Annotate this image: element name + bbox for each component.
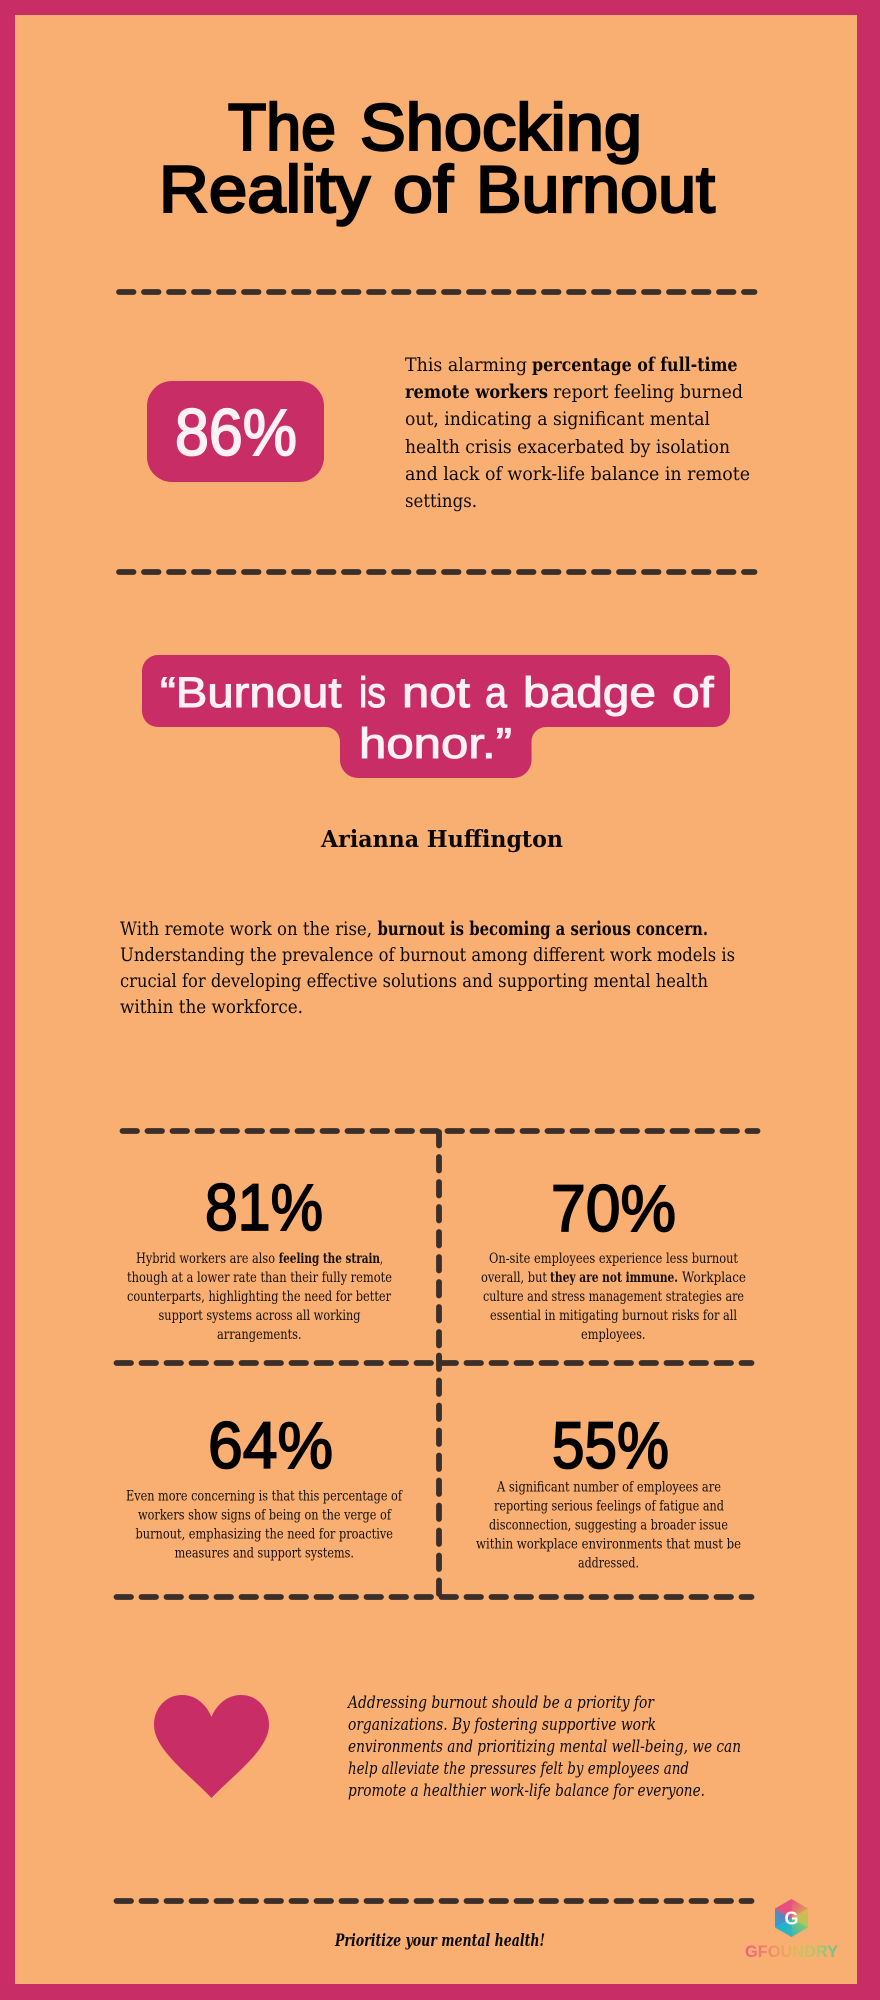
stat description: percentage of full-time	[532, 354, 738, 376]
stat cell: 55% fatigue and disconnection: reporting serious feelings of fatigue and	[494, 1499, 724, 1515]
panel: stats grid	[116, 1131, 758, 1597]
stat cell: 55% fatigue and disconnection: within workplace environments that must be	[476, 1537, 741, 1553]
stat cell: 81% hybrid workers: 81%	[205, 1170, 323, 1244]
stat cell: 70% on-site employees: employees.	[581, 1327, 646, 1343]
stat cell: 70% on-site employees: Workplace	[682, 1270, 746, 1286]
stat description: health crisis exacerbated by isolation	[405, 437, 730, 458]
icon: hexagon mark: G	[784, 1908, 799, 1928]
stat cell: 70% on-site employees: On-site employees experience less burnout	[489, 1251, 738, 1267]
quote callout: badge	[523, 669, 656, 717]
stat cell: 55% fatigue and disconnection: addressed.	[578, 1556, 639, 1572]
stat cell: 64% verge of burnout: workers show signs of being on the verge of	[138, 1508, 392, 1524]
stat cell: 64% verge of burnout	[126, 1408, 403, 1562]
logo: GFoundry: GFOUNDRY	[745, 1943, 838, 1961]
stat cell: 70% on-site employees	[481, 1171, 746, 1343]
intro paragraph: With remote work on the rise,	[120, 919, 372, 940]
stat cell: 70% on-site employees: culture and stress management strategies are	[483, 1289, 744, 1305]
intro paragraph: Understanding the prevalence of burnout among different work models is	[120, 945, 735, 966]
title	[159, 90, 715, 226]
stat cell: 55% fatigue and disconnection: 55%	[552, 1408, 669, 1482]
intro paragraph: within the workforce.	[120, 997, 303, 1018]
closing paragraph: organizations. By fostering supportive work	[348, 1715, 656, 1734]
logo: GFoundry	[745, 1899, 838, 1961]
stat cell: 81% hybrid workers: feeling the strain	[279, 1251, 380, 1267]
closing paragraph: help alleviate the pressures felt by employees and	[348, 1759, 689, 1778]
stat cell: 70% on-site employees: essential in mitigating burnout risks for all	[490, 1308, 737, 1324]
title: of	[393, 152, 454, 226]
stat cell: 64% verge of burnout: measures and support systems.	[175, 1546, 354, 1562]
stat cell: 81% hybrid workers: support systems across all working	[158, 1308, 361, 1324]
closing call to action: Prioritize your mental health!	[334, 1931, 545, 1950]
title: Reality	[159, 152, 370, 226]
stat cell: 70% on-site employees: 70%	[551, 1171, 676, 1245]
stat cell: 81% hybrid workers: though at a lower rate than their fully remote	[127, 1270, 392, 1286]
icon: heart	[154, 1695, 269, 1798]
panel: 86% stat	[147, 354, 750, 512]
stat cell: 55% fatigue and disconnection	[476, 1408, 741, 1572]
quote callout: is	[359, 669, 386, 717]
closing paragraph: environments and prioritizing mental well-being, we can	[348, 1737, 741, 1756]
stat cell: 55% fatigue and disconnection: A significant number of employees are	[496, 1480, 721, 1496]
stat description: This alarming	[405, 355, 527, 376]
stat description: out, indicating a significant mental	[405, 409, 710, 430]
stat cell: 81% hybrid workers: Hybrid workers are also	[136, 1251, 275, 1267]
intro paragraph: burnout is becoming a serious concern.	[378, 918, 708, 940]
title: The	[228, 90, 336, 164]
stat cell: 64% verge of burnout: Even more concerning is that this percentage of	[126, 1489, 403, 1505]
quote callout: of	[672, 669, 715, 717]
closing paragraph	[346, 1693, 741, 1800]
stat cell: 70% on-site employees: overall, but	[481, 1270, 547, 1286]
closing paragraph: promote a healthier work-life balance for everyone.	[348, 1781, 705, 1800]
stat badge: 86%	[147, 381, 324, 482]
stat cell: 81% hybrid workers: counterparts, highlighting the need for better	[127, 1289, 391, 1305]
title: Shocking	[360, 90, 642, 164]
stat description: settings.	[405, 491, 477, 512]
quote callout: “Burnout	[160, 669, 342, 717]
intro paragraph: crucial for developing effective solutions and supporting mental health	[120, 971, 708, 992]
closing paragraph: Addressing burnout should be a priority for	[346, 1693, 655, 1712]
quote callout: a	[485, 669, 507, 717]
stat cell: 55% fatigue and disconnection: disconnection, suggesting a broader issue	[489, 1518, 728, 1534]
stat cell: 81% hybrid workers: arrangements.	[217, 1327, 302, 1343]
quote callout: not	[402, 669, 470, 717]
intro paragraph	[120, 918, 735, 1018]
stat description: report feeling burned	[553, 382, 743, 403]
title: Burnout	[476, 152, 715, 226]
stat cell: 64% verge of burnout: burnout, emphasizing the need for proactive	[136, 1527, 393, 1543]
stat cell: 81% hybrid workers	[127, 1170, 392, 1343]
stat description: and lack of work-life balance in remote	[405, 464, 750, 485]
quote callout	[142, 655, 730, 778]
stat description	[405, 354, 750, 512]
stat cell: 81% hybrid workers: ,	[380, 1251, 383, 1267]
stat description: remote workers	[405, 381, 548, 403]
quote attribution: Arianna Huffington	[320, 826, 563, 853]
stat cell: 70% on-site employees: they are not immune.	[550, 1270, 678, 1286]
stat cell: 64% verge of burnout: 64%	[208, 1408, 333, 1482]
stat badge: 86%: 86%	[175, 395, 297, 469]
quote callout: honor.”	[359, 720, 512, 768]
